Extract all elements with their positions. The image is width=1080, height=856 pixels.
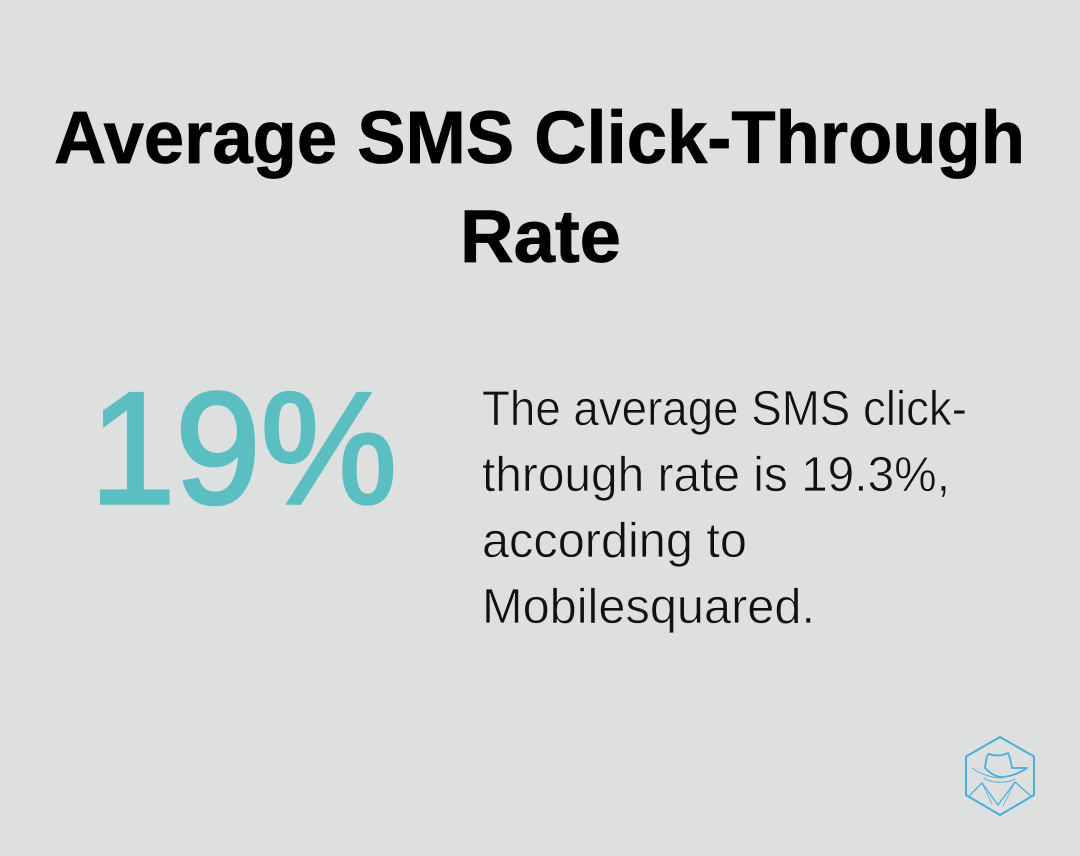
icon: hexagon logo with hat and coat [966, 737, 1034, 815]
description text: The average SMS click- [482, 382, 967, 436]
description text [482, 382, 967, 634]
description text: through rate is 19.3%, [482, 448, 950, 502]
title: Average SMS Click-Through [54, 96, 1025, 179]
description text: according to [482, 514, 747, 568]
description text: Mobilesquared. [482, 580, 815, 634]
big statistic: 19%: 19% [90, 359, 397, 537]
title: Rate [460, 195, 621, 278]
title [54, 96, 1025, 278]
